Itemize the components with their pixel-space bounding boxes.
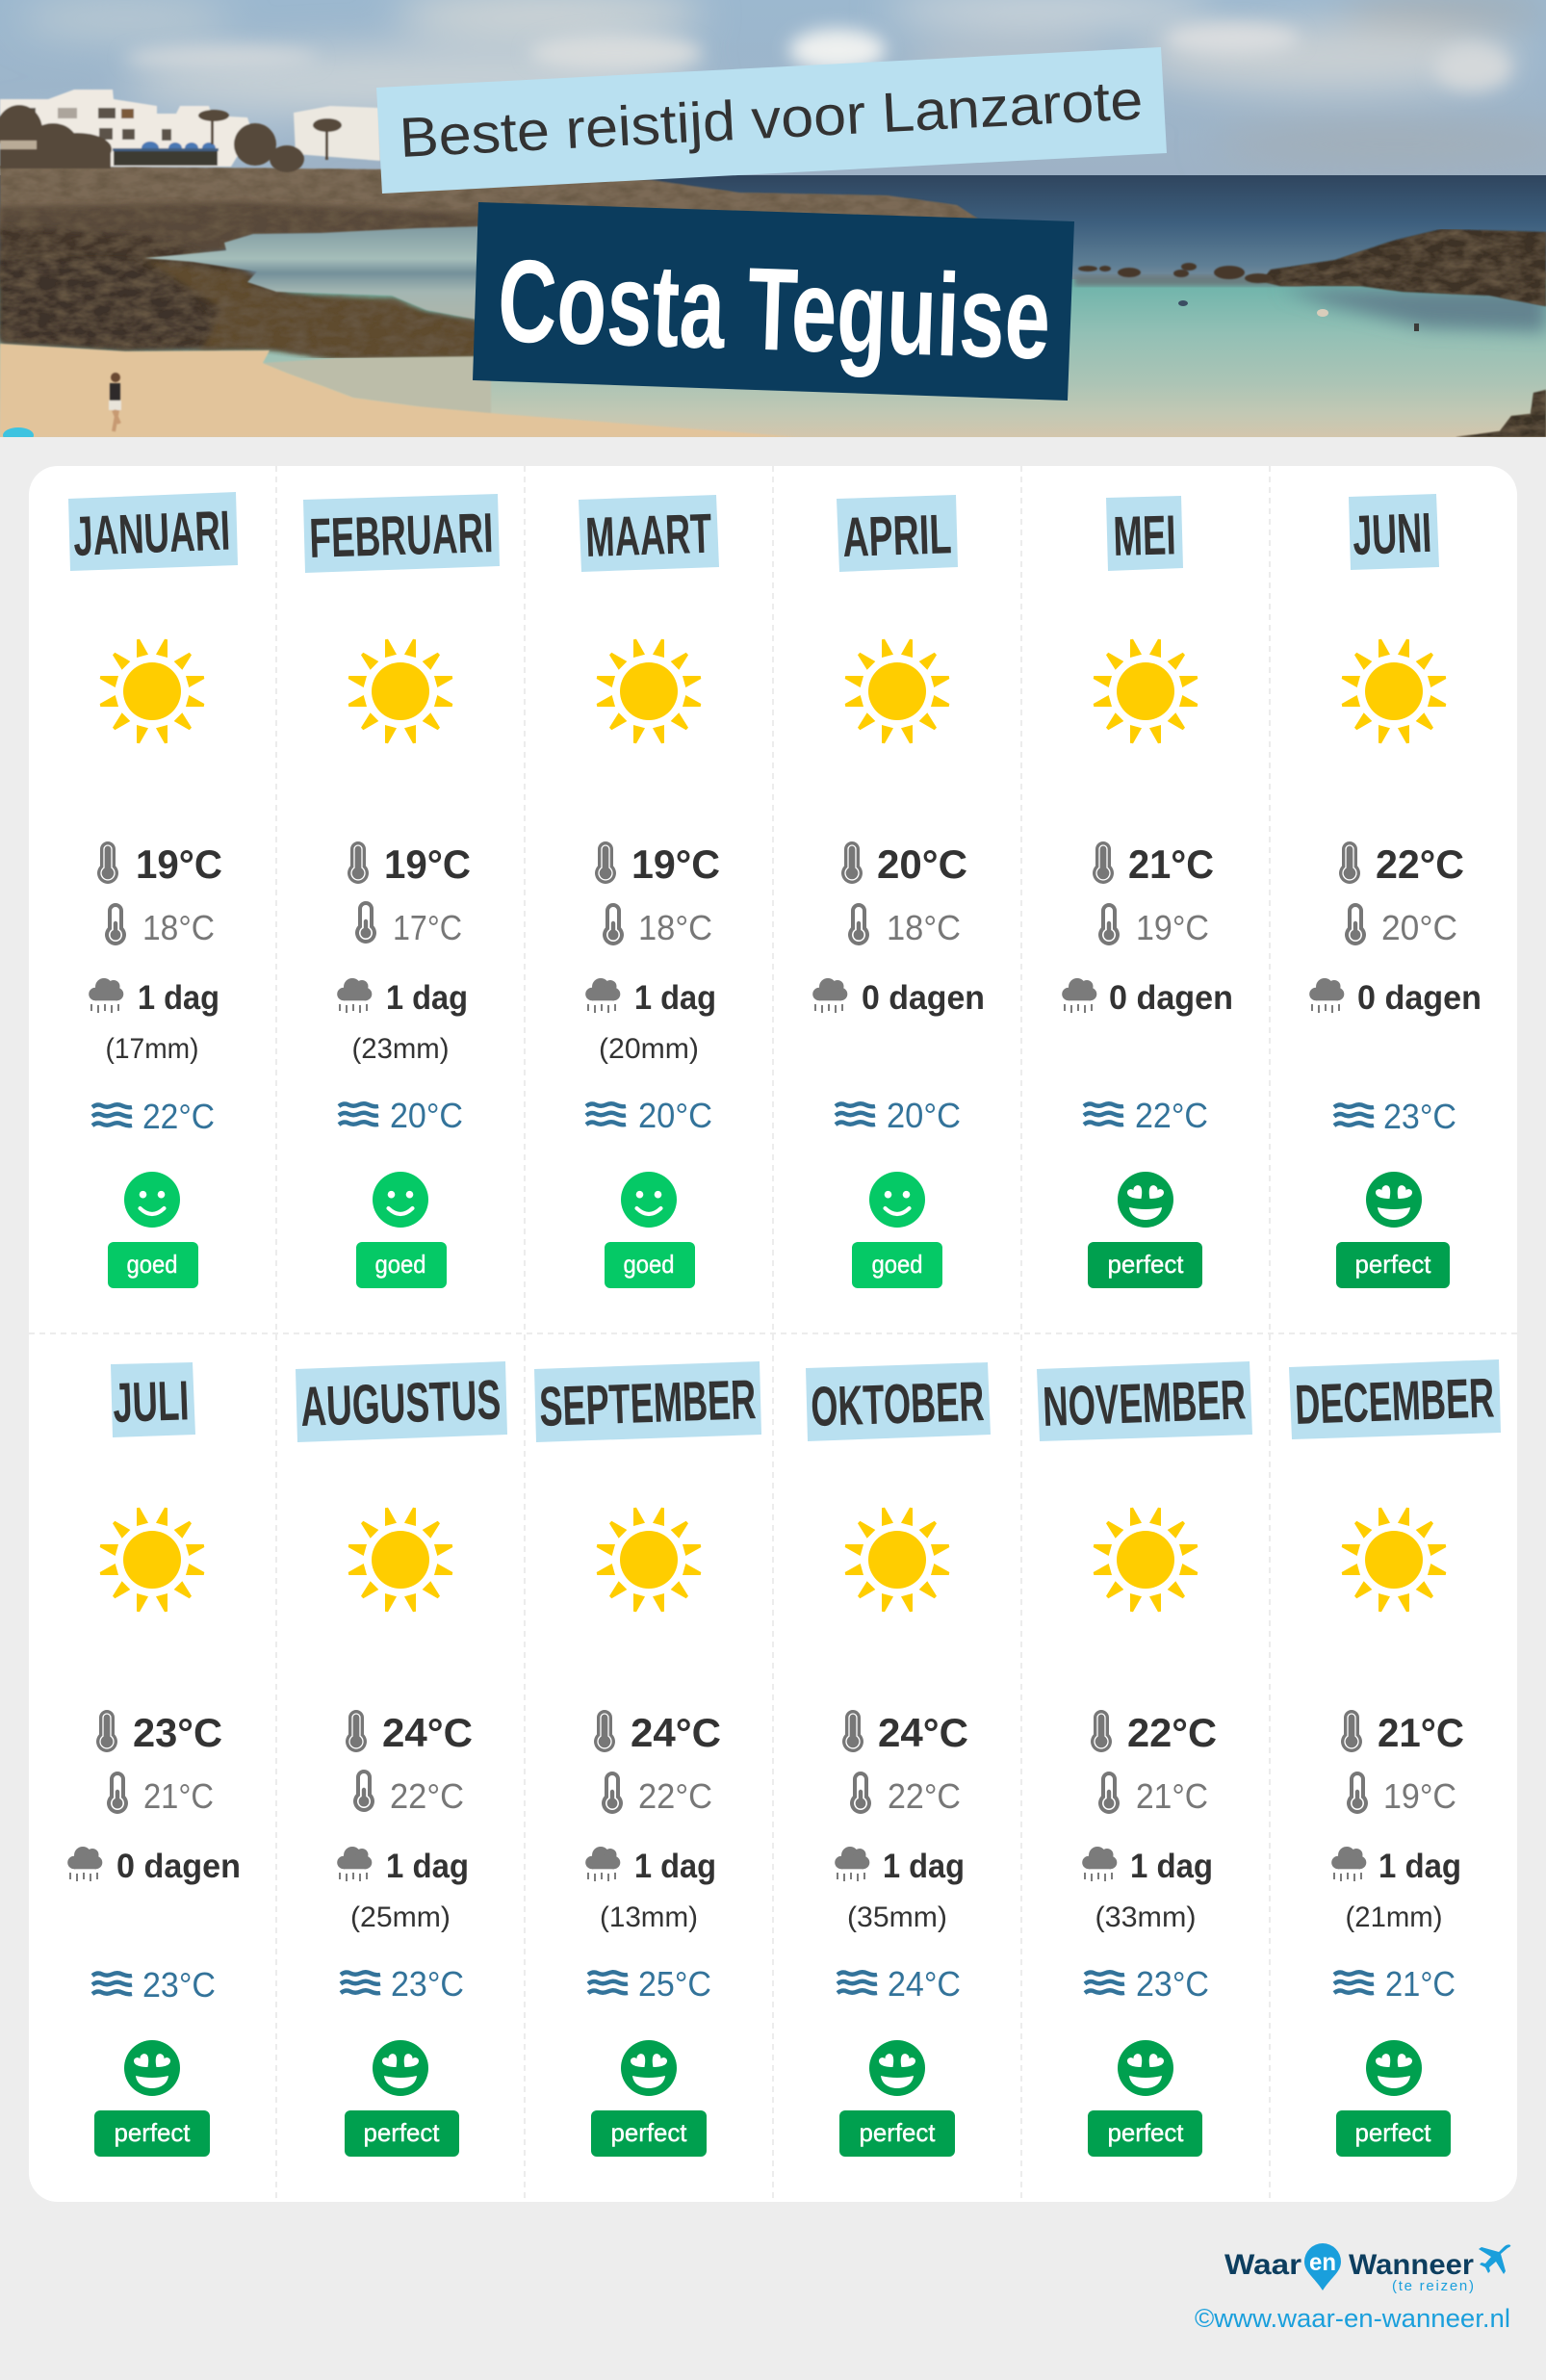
icon: max thermometer bbox=[346, 1710, 367, 1752]
icon: min thermometer bbox=[603, 903, 624, 945]
logo: Waar en Wanneer: Wanneer bbox=[1349, 2249, 1474, 2281]
rain days: 1 dag bbox=[138, 979, 219, 1017]
icon: rain cloud bbox=[812, 978, 847, 1013]
icon: heart-eyes smiley bbox=[1118, 1172, 1173, 1228]
sea temperature: 25°C bbox=[638, 1964, 711, 2004]
icon: waves bbox=[836, 1103, 875, 1125]
rating badge bbox=[605, 1242, 695, 1288]
rating badge bbox=[1088, 1242, 1202, 1288]
rain days: 0 dagen bbox=[116, 1848, 241, 1885]
rating badge: goed bbox=[872, 1250, 922, 1279]
icon: waves bbox=[339, 1103, 378, 1125]
icon: rain cloud bbox=[585, 1847, 620, 1881]
month heading: FEBRUARI bbox=[308, 502, 494, 570]
month heading bbox=[1106, 496, 1183, 571]
white buildings bbox=[0, 90, 380, 172]
icon: sun bbox=[845, 639, 949, 743]
max temperature: 21°C bbox=[1378, 1710, 1464, 1755]
month heading bbox=[1037, 1361, 1252, 1441]
icon: smiley bbox=[869, 1172, 925, 1228]
sea temperature: 22°C bbox=[1135, 1096, 1208, 1135]
rainfall: (25mm) bbox=[350, 1901, 451, 1933]
rating badge bbox=[1336, 2110, 1451, 2157]
rating badge bbox=[591, 2110, 707, 2157]
panel: augustus bbox=[296, 1361, 507, 2157]
icon: heart-eyes smiley bbox=[373, 2040, 428, 2096]
rating badge: perfect bbox=[1355, 1250, 1431, 1279]
icon: sun bbox=[100, 639, 204, 743]
subtitle banner: Beste reistijd voor Lanzarote bbox=[398, 68, 1145, 169]
lagoon bbox=[144, 226, 486, 320]
rating badge: perfect bbox=[364, 2118, 440, 2147]
icon: sun bbox=[1094, 1508, 1198, 1612]
max temperature: 21°C bbox=[1128, 841, 1214, 887]
panel: november bbox=[1037, 1361, 1252, 2157]
rating badge: perfect bbox=[1107, 2118, 1184, 2147]
icon: min thermometer bbox=[850, 1772, 871, 1814]
panel: december bbox=[1289, 1359, 1501, 2157]
month heading bbox=[1349, 494, 1439, 570]
title banner: Costa Teguise bbox=[496, 235, 1052, 384]
rating badge: perfect bbox=[1107, 1250, 1184, 1279]
rating badge bbox=[839, 2110, 955, 2157]
panel: februari bbox=[303, 494, 500, 1288]
panel: september bbox=[534, 1361, 761, 2157]
rainfall: (23mm) bbox=[352, 1033, 449, 1065]
month heading bbox=[837, 495, 958, 572]
rainfall: (20mm) bbox=[599, 1033, 699, 1065]
icon: heart-eyes smiley bbox=[621, 2040, 677, 2096]
icon: max thermometer bbox=[97, 841, 118, 884]
rating badge: perfect bbox=[610, 2118, 687, 2147]
min temperature: 21°C bbox=[1136, 1776, 1208, 1816]
icon: min thermometer bbox=[105, 903, 126, 945]
icon: heart-eyes smiley bbox=[869, 2040, 925, 2096]
icon: smiley bbox=[621, 1172, 677, 1228]
subtitle banner bbox=[376, 47, 1167, 194]
icon: waves bbox=[1334, 1972, 1374, 1993]
month heading bbox=[579, 495, 719, 572]
month heading: APRIL bbox=[841, 503, 952, 569]
reef band bbox=[1074, 275, 1305, 286]
icon: max thermometer bbox=[841, 841, 863, 884]
beach blanket bbox=[3, 427, 34, 437]
month heading: JULI bbox=[112, 1369, 190, 1435]
month heading: OKTOBER bbox=[810, 1370, 985, 1438]
icon: waves bbox=[92, 1104, 132, 1125]
min temperature: 19°C bbox=[1383, 1776, 1456, 1816]
icon: rain cloud bbox=[1062, 978, 1096, 1013]
sea temperature: 23°C bbox=[391, 1964, 464, 2004]
sea temperature: 21°C bbox=[1385, 1964, 1456, 2004]
icon: sun bbox=[1342, 1508, 1446, 1612]
icon: max thermometer bbox=[348, 841, 369, 884]
max temperature: 22°C bbox=[1127, 1710, 1217, 1755]
icon: rain cloud bbox=[835, 1847, 869, 1881]
month heading bbox=[68, 492, 238, 571]
logo: Waar en Wanneer: en bbox=[1309, 2249, 1336, 2276]
icon: waves bbox=[1084, 1103, 1123, 1125]
icon: heart-eyes smiley bbox=[1366, 2040, 1422, 2096]
website url: ©www.waar-en-wanneer.nl bbox=[1195, 2304, 1510, 2333]
min temperature: 17°C bbox=[393, 908, 462, 947]
icon: smiley bbox=[124, 1172, 180, 1228]
max temperature: 24°C bbox=[382, 1710, 473, 1755]
panel: juni bbox=[1309, 494, 1482, 1288]
sea temperature: 23°C bbox=[142, 1965, 216, 2005]
icon: sun bbox=[597, 639, 701, 743]
icon: max thermometer bbox=[1339, 841, 1360, 884]
sea temperature: 24°C bbox=[888, 1964, 961, 2004]
icon: min thermometer bbox=[355, 901, 376, 944]
icon: sun bbox=[845, 1508, 949, 1612]
month heading bbox=[111, 1362, 195, 1437]
white card panel bbox=[29, 466, 1517, 2202]
icon: min thermometer bbox=[848, 903, 869, 945]
walker on beach bbox=[109, 373, 121, 431]
icon: sun bbox=[597, 1508, 701, 1612]
max temperature: 19°C bbox=[136, 841, 222, 887]
rain days: 1 dag bbox=[1379, 1848, 1461, 1885]
panel: januari bbox=[68, 492, 238, 1288]
sea temperature: 23°C bbox=[1383, 1097, 1456, 1136]
icon: min thermometer bbox=[1098, 1772, 1120, 1814]
icon: waves bbox=[586, 1103, 626, 1125]
rain days: 0 dagen bbox=[1109, 979, 1233, 1017]
month heading bbox=[296, 1361, 507, 1442]
icon: waves bbox=[92, 1973, 132, 1994]
rating badge bbox=[345, 2110, 459, 2157]
icon: sun bbox=[1094, 639, 1198, 743]
sea temperature: 20°C bbox=[390, 1096, 463, 1135]
min temperature: 20°C bbox=[1381, 908, 1457, 947]
icon: rain cloud bbox=[337, 1847, 372, 1881]
max temperature: 24°C bbox=[631, 1710, 721, 1755]
rating badge: goed bbox=[127, 1250, 177, 1279]
icon: heart-eyes smiley bbox=[1366, 1172, 1422, 1228]
rainfall: (33mm) bbox=[1095, 1901, 1196, 1933]
rain days: 1 dag bbox=[386, 979, 468, 1017]
icon: rain cloud bbox=[585, 978, 620, 1013]
rating badge bbox=[1336, 1242, 1450, 1288]
icon: max thermometer bbox=[842, 1710, 863, 1752]
max temperature: 23°C bbox=[133, 1710, 222, 1755]
month heading bbox=[534, 1361, 761, 1442]
rainfall: (17mm) bbox=[106, 1033, 198, 1065]
icon: rain cloud bbox=[89, 978, 123, 1013]
panel: juli bbox=[67, 1362, 241, 2157]
sea temperature: 20°C bbox=[638, 1096, 712, 1135]
max temperature: 24°C bbox=[878, 1710, 968, 1755]
icon: rain cloud bbox=[1082, 1847, 1117, 1881]
icon: smiley bbox=[373, 1172, 428, 1228]
rating badge bbox=[356, 1242, 447, 1288]
right rocks bbox=[1261, 229, 1546, 437]
icon: waves bbox=[341, 1972, 380, 1993]
rating badge: goed bbox=[375, 1250, 425, 1279]
rain days: 1 dag bbox=[386, 1848, 469, 1885]
month heading: JANUARI bbox=[72, 500, 231, 568]
month heading: MAART bbox=[584, 503, 712, 569]
icon: rain cloud bbox=[1331, 1847, 1366, 1881]
max temperature: 20°C bbox=[877, 841, 967, 887]
icon: waves bbox=[1334, 1104, 1374, 1125]
rain days: 0 dagen bbox=[862, 979, 985, 1017]
max temperature: 19°C bbox=[631, 841, 720, 887]
icon: min thermometer bbox=[1098, 903, 1120, 945]
icon: sun bbox=[348, 639, 452, 743]
min temperature: 19°C bbox=[1136, 908, 1209, 947]
icon: heart-eyes smiley bbox=[1118, 2040, 1173, 2096]
icon: waves bbox=[837, 1972, 877, 1993]
icon: waves bbox=[588, 1972, 628, 1993]
panel: mei bbox=[1062, 496, 1233, 1288]
icon: sun bbox=[1342, 639, 1446, 743]
rain days: 1 dag bbox=[1130, 1848, 1213, 1885]
icon: max thermometer bbox=[595, 841, 616, 884]
max temperature: 19°C bbox=[384, 841, 471, 887]
icon: min thermometer bbox=[353, 1770, 374, 1812]
icon: max thermometer bbox=[1341, 1710, 1362, 1752]
icon: sun bbox=[348, 1508, 452, 1612]
min temperature: 18°C bbox=[887, 908, 961, 947]
sea temperature: 22°C bbox=[142, 1097, 215, 1136]
swimmers bbox=[1178, 300, 1419, 331]
month heading bbox=[303, 494, 500, 573]
wet shore water bbox=[265, 355, 491, 412]
rain days: 0 dagen bbox=[1357, 979, 1482, 1017]
min temperature: 22°C bbox=[638, 1776, 712, 1816]
rating badge bbox=[94, 2110, 210, 2157]
panel: oktober bbox=[806, 1362, 991, 2157]
icon: rain cloud bbox=[337, 978, 372, 1013]
rain days: 1 dag bbox=[883, 1848, 965, 1885]
icon: max thermometer bbox=[594, 1710, 615, 1752]
min temperature: 22°C bbox=[390, 1776, 464, 1816]
rating badge: goed bbox=[624, 1250, 674, 1279]
icon: rain cloud bbox=[67, 1847, 102, 1881]
min temperature: 18°C bbox=[638, 908, 712, 947]
rating badge bbox=[1088, 2110, 1202, 2157]
min temperature: 21°C bbox=[143, 1776, 214, 1816]
month heading: MEI bbox=[1113, 504, 1176, 568]
rainfall: (35mm) bbox=[847, 1901, 947, 1933]
rating badge: perfect bbox=[114, 2118, 191, 2147]
min temperature: 22°C bbox=[888, 1776, 961, 1816]
icon: rain cloud bbox=[1309, 978, 1344, 1013]
logo: Waar en Wanneer bbox=[1224, 2243, 1510, 2294]
icon: min thermometer bbox=[1347, 1772, 1368, 1814]
icon: min thermometer bbox=[602, 1772, 623, 1814]
icon: min thermometer bbox=[107, 1772, 128, 1814]
month heading: AUGUSTUS bbox=[299, 1368, 502, 1438]
title banner bbox=[473, 202, 1074, 401]
panel: maart bbox=[579, 495, 720, 1288]
rating badge bbox=[108, 1242, 198, 1288]
rain days: 1 dag bbox=[634, 1848, 716, 1885]
icon: max thermometer bbox=[1091, 1710, 1112, 1752]
icon: min thermometer bbox=[1345, 903, 1366, 945]
month heading bbox=[806, 1362, 991, 1441]
rainfall: (21mm) bbox=[1346, 1901, 1442, 1933]
month heading: JUNI bbox=[1352, 502, 1432, 567]
month heading: NOVEMBER bbox=[1042, 1368, 1247, 1438]
rainfall: (13mm) bbox=[600, 1901, 698, 1933]
sand beach bbox=[0, 344, 799, 437]
rain days: 1 dag bbox=[634, 979, 716, 1017]
panel: april bbox=[812, 495, 985, 1288]
logo: Waar en Wanneer: (te reizen) bbox=[1392, 2278, 1474, 2294]
icon: sun bbox=[100, 1508, 204, 1612]
month heading: SEPTEMBER bbox=[538, 1368, 757, 1438]
sea temperature: 23°C bbox=[1136, 1964, 1209, 2004]
sea temperature: 20°C bbox=[887, 1096, 961, 1135]
icon: waves bbox=[1085, 1972, 1124, 1993]
icon: max thermometer bbox=[96, 1710, 117, 1752]
icon: heart-eyes smiley bbox=[124, 2040, 180, 2096]
icon: max thermometer bbox=[1093, 841, 1114, 884]
rating badge bbox=[852, 1242, 942, 1288]
max temperature: 22°C bbox=[1376, 841, 1464, 887]
logo: Waar en Wanneer: Waar bbox=[1224, 2249, 1301, 2281]
header photo: beach of Costa Teguise bbox=[0, 0, 1546, 443]
rocky shore bbox=[0, 166, 982, 358]
rating badge: perfect bbox=[1355, 2118, 1431, 2147]
min temperature: 18°C bbox=[142, 908, 215, 947]
dark shallow patch bbox=[1280, 289, 1546, 332]
rating badge: perfect bbox=[859, 2118, 936, 2147]
